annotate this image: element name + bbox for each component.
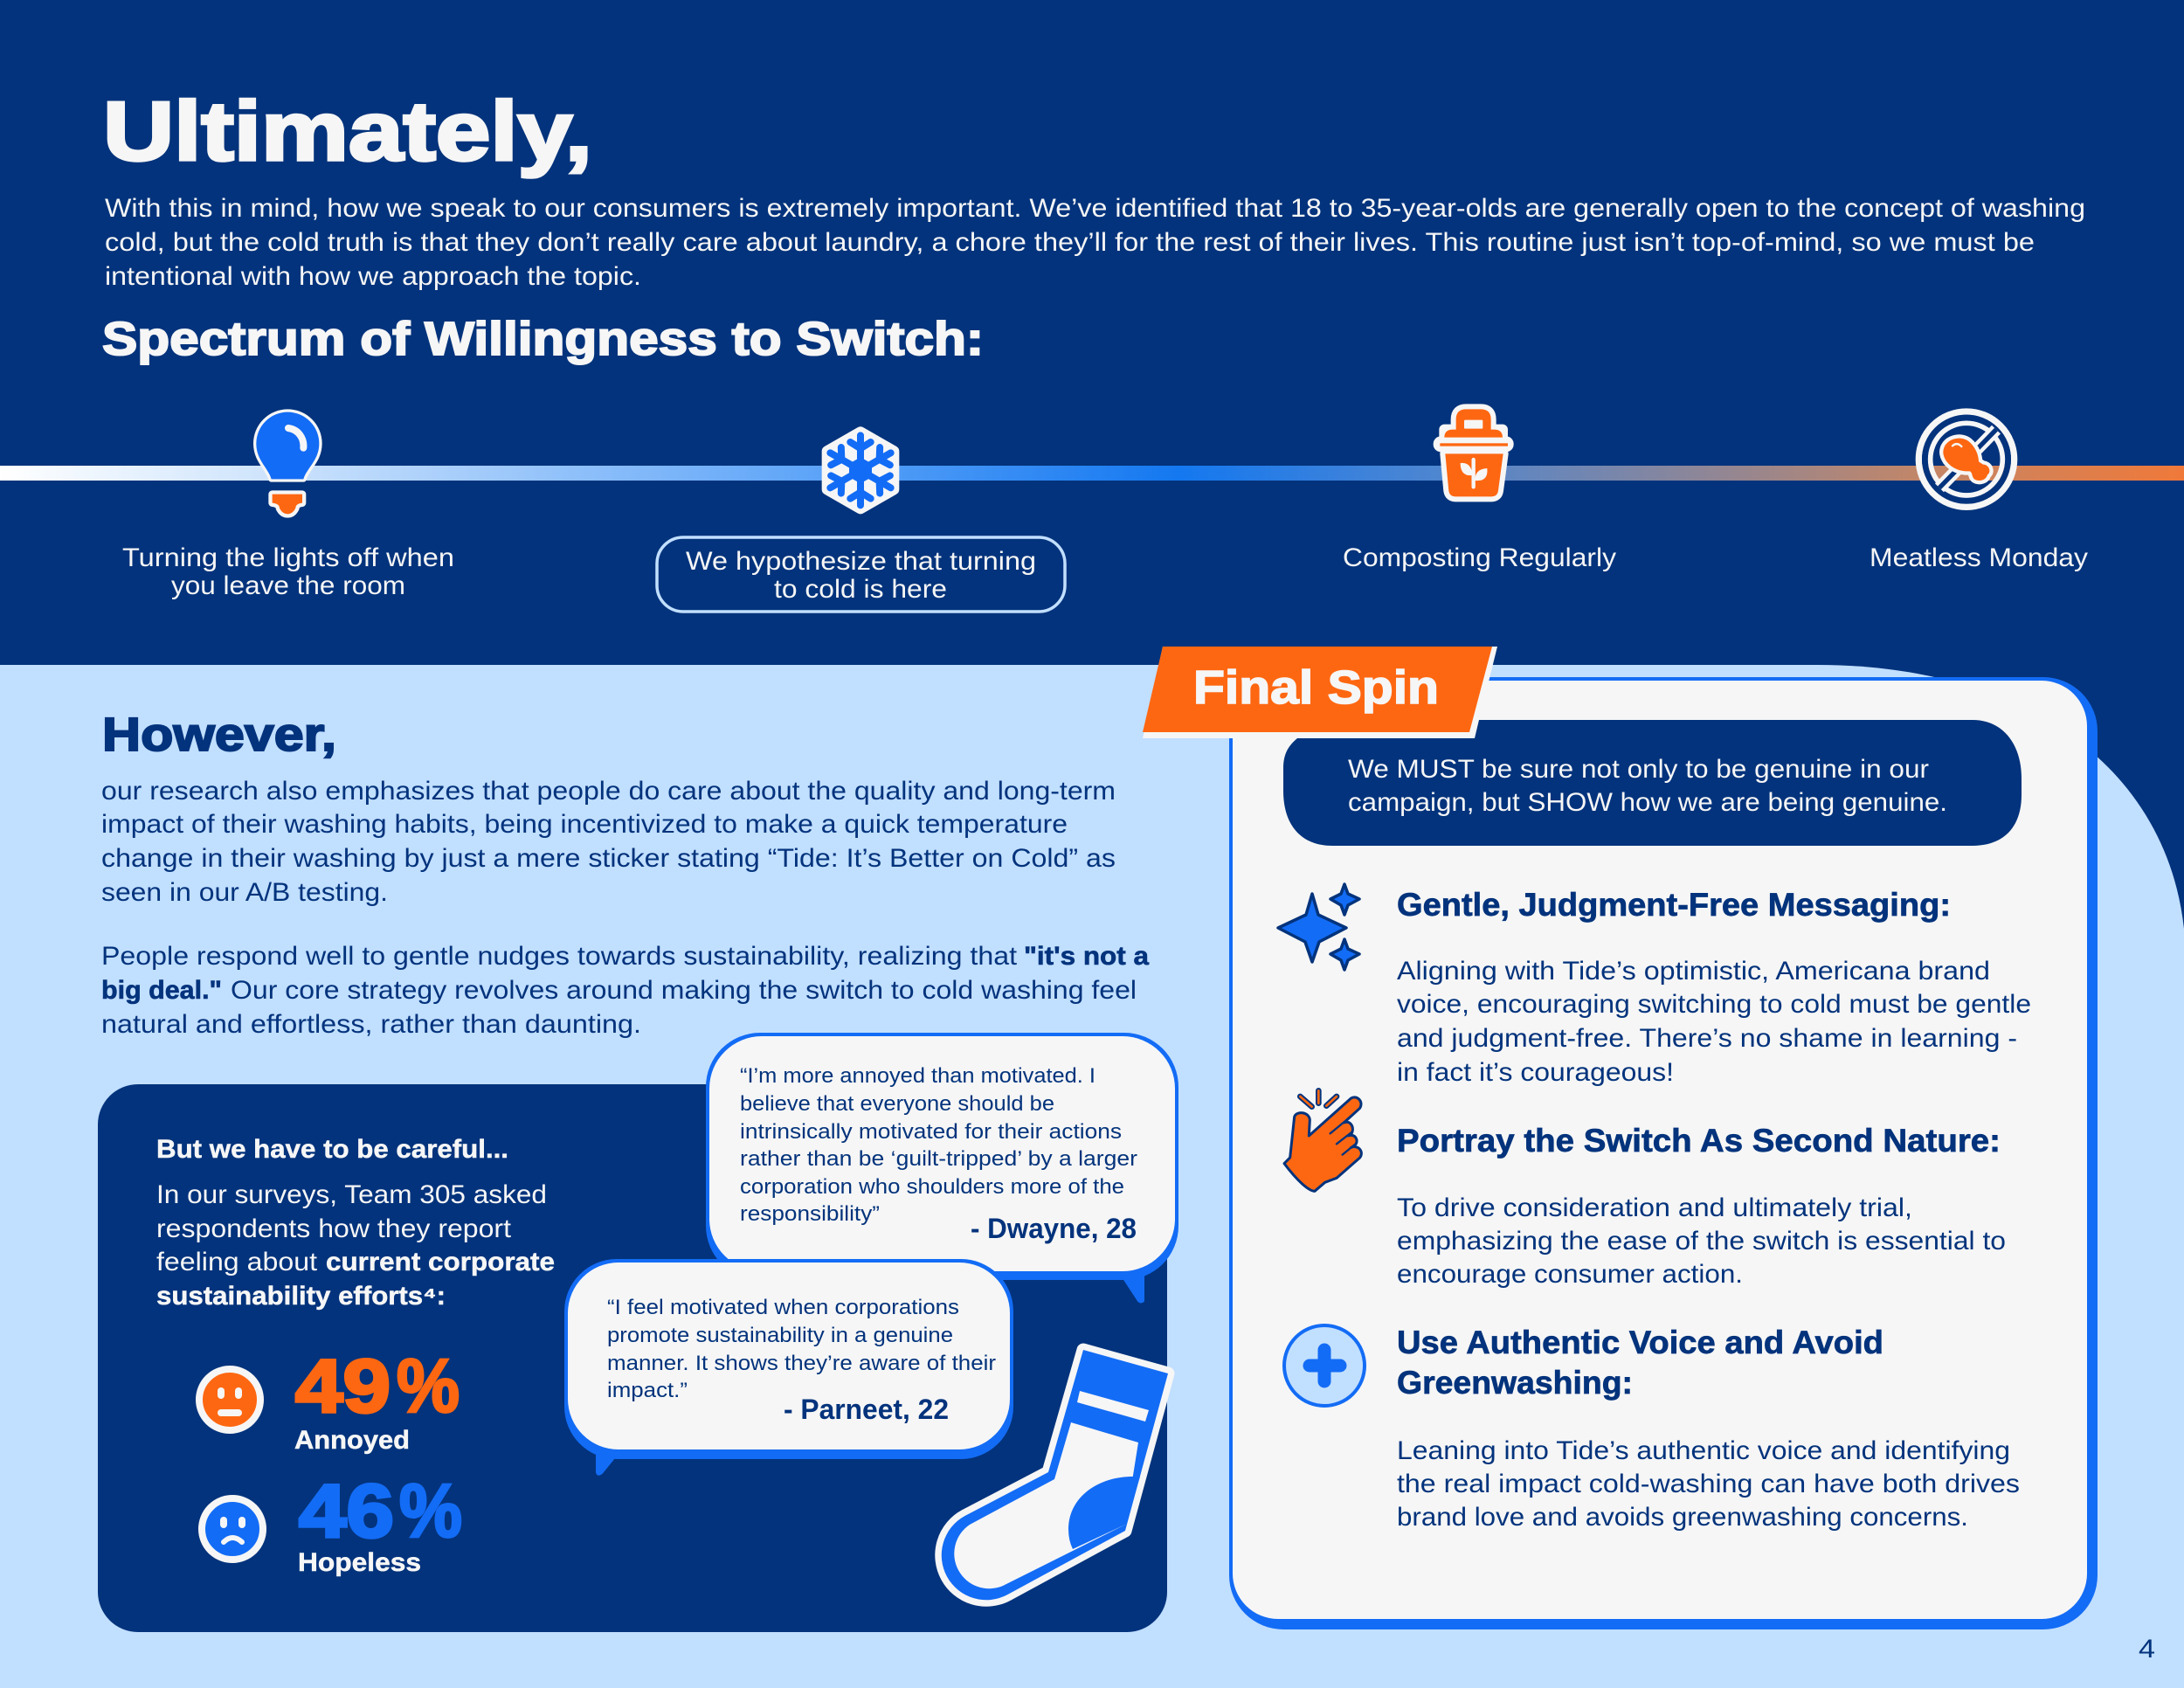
- stat: 49% annoyed: Annoyed: [294, 1426, 410, 1455]
- stat: 49% annoyed: 49: [295, 1345, 390, 1429]
- gentle nudges paragraph: big deal.": [101, 976, 222, 1005]
- lower light-blue background panel: [0, 665, 2184, 1688]
- speech bubble: Parneet: “I feel motivated when corporations: [607, 1296, 959, 1319]
- speech bubble: Dwayne: [706, 1033, 1178, 1302]
- gentle nudges paragraph: natural and effortless, rather than daunting.: [101, 1010, 641, 1039]
- label: hypothesis callout: [657, 537, 1065, 612]
- speech bubble: Parneet: promote sustainability in a genuine: [607, 1324, 953, 1347]
- gentle nudges paragraph: "it's not a: [1024, 942, 1149, 971]
- careful heading: But we have to be careful...: [156, 1135, 508, 1164]
- icon: no meat: [1918, 412, 2015, 507]
- spectrum gradient track: [0, 466, 2184, 481]
- icon: snowflake: [826, 432, 895, 508]
- intro paragraph: [105, 194, 2085, 291]
- label: hypothesis callout: We hypothesize that turning: [686, 547, 1036, 576]
- survey description: In our surveys, Team 305 asked: [156, 1180, 547, 1209]
- icon: light bulb: [256, 412, 319, 514]
- stat: 46% hopeless: Hopeless: [298, 1548, 421, 1577]
- survey description: respondents how they report: [156, 1214, 512, 1243]
- icon: sparkles: [1278, 884, 1359, 970]
- speech bubble: Parneet: manner. It shows they’re aware of their: [607, 1352, 996, 1375]
- label: composting: Composting Regularly: [1343, 543, 1616, 572]
- research paragraph: seen in our A/B testing.: [101, 878, 388, 907]
- section: portray the switch: Portray the Switch As Second Nature:: [1397, 1123, 2001, 1159]
- icon: plus circle: [1284, 1325, 1365, 1406]
- section: authentic voice: Leaning into Tide’s authentic voice and identifying: [1397, 1436, 2010, 1465]
- research paragraph: [101, 777, 1116, 907]
- speech bubble: Dwayne: believe that everyone should be: [740, 1092, 1054, 1116]
- gentle nudges paragraph: People respond well to gentle nudges towards sustainability, realizing that: [101, 942, 1018, 971]
- survey description: feeling about: [156, 1248, 318, 1276]
- speech bubble: Parneet: - Parneet, 22: [784, 1394, 949, 1425]
- research paragraph: change in their washing by just a mere sticker stating “Tide: It’s Better on Cold” as: [101, 844, 1116, 873]
- heading: however: However,: [102, 709, 336, 761]
- panel: final spin card: [1229, 677, 2098, 1629]
- section: portray the switch: To drive consideration and ultimately trial,: [1397, 1193, 1912, 1222]
- label: turning the lights off: [122, 543, 454, 600]
- section: gentle messaging: voice, encouraging switching to cold must be gentle: [1397, 990, 2031, 1019]
- section: authentic voice: [1397, 1325, 2020, 1532]
- icon: hopeless face: [202, 1498, 263, 1560]
- icon: compost bucket: [1434, 409, 1514, 496]
- stat: 46% hopeless: [298, 1470, 462, 1577]
- label: turning the lights off: you leave the room: [171, 571, 405, 600]
- section: gentle messaging: Aligning with Tide’s optimistic, Americana brand: [1397, 957, 1990, 986]
- speech bubble: Dwayne: rather than be ‘guilt-tripped’ by a larger: [740, 1147, 1137, 1171]
- section: gentle messaging: and judgment-free. There’s no shame in learning -: [1397, 1024, 2017, 1053]
- label: turning the lights off: Turning the lights off when: [122, 543, 454, 572]
- research paragraph: our research also emphasizes that people do care about the quality and long-term: [101, 777, 1116, 806]
- label: hypothesis callout: to cold is here: [774, 575, 947, 604]
- intro paragraph: With this in mind, how we speak to our consumers is extremely important. We’ve identified that 18 to 35-year-olds are generally open to the concept of washing: [105, 194, 2085, 223]
- final spin tag: [1143, 647, 1497, 738]
- callout pill: [1283, 720, 2022, 846]
- icon: snapping hand: [1284, 1090, 1361, 1191]
- speech bubble: Parneet: [564, 1259, 1013, 1475]
- gentle nudges paragraph: [101, 942, 1149, 1039]
- spectrum heading: Spectrum of Willingness to Switch:: [102, 313, 984, 365]
- icon: sock: [942, 1350, 1168, 1600]
- speech bubble: Dwayne: intrinsically motivated for their actions: [740, 1120, 1122, 1144]
- stat: 49% annoyed: [294, 1345, 460, 1455]
- intro paragraph: cold, but the cold truth is that they don’t really care about laundry, a chore they’ll for the rest of their lives. This routine just isn’t top-of-mind, so we must be: [105, 228, 2035, 257]
- final spin tag: Final Spin: [1193, 661, 1439, 714]
- section: authentic voice: the real impact cold-washing can have both drives: [1397, 1470, 2020, 1498]
- title: Ultimately,: [103, 85, 592, 178]
- icon: annoyed face: [199, 1369, 260, 1430]
- section: portray the switch: [1397, 1123, 2006, 1289]
- section: authentic voice: Greenwashing:: [1397, 1365, 1633, 1401]
- section: gentle messaging: Gentle, Judgment-Free Messaging:: [1397, 887, 1951, 923]
- section: portray the switch: encourage consumer action.: [1397, 1260, 1743, 1289]
- survey description: [156, 1180, 555, 1311]
- stat: 46% hopeless: %: [399, 1470, 462, 1553]
- speech bubble: Dwayne: - Dwayne, 28: [971, 1213, 1137, 1244]
- stat: 49% annoyed: %: [397, 1345, 460, 1429]
- speech bubble: Parneet: impact.”: [607, 1379, 688, 1402]
- gentle nudges paragraph: Our core strategy revolves around making the switch to cold washing feel: [231, 976, 1137, 1005]
- section: authentic voice: brand love and avoids greenwashing concerns.: [1397, 1503, 1968, 1532]
- survey description: current corporate: [326, 1248, 555, 1276]
- research paragraph: impact of their washing habits, being incentivized to make a quick temperature: [101, 810, 1068, 839]
- callout pill: We MUST be sure not only to be genuine in our: [1348, 755, 1929, 784]
- section: authentic voice: Use Authentic Voice and Avoid: [1397, 1325, 1883, 1360]
- page number: 4: [2139, 1635, 2155, 1664]
- callout pill: campaign, but SHOW how we are being genuine.: [1348, 788, 1947, 817]
- speech bubble: Dwayne: corporation who shoulders more of the: [740, 1175, 1124, 1199]
- stat: 46% hopeless: 46: [299, 1470, 394, 1553]
- section: gentle messaging: [1397, 887, 2031, 1087]
- intro paragraph: intentional with how we approach the topic.: [105, 262, 641, 291]
- section: gentle messaging: in fact it’s courageous!: [1397, 1058, 1674, 1087]
- section: portray the switch: emphasizing the ease of the switch is essential to: [1397, 1227, 2006, 1256]
- speech bubble: Dwayne: responsibility”: [740, 1202, 880, 1226]
- survey description: sustainability efforts⁴:: [156, 1282, 446, 1311]
- panel: but we have to be careful: [98, 1084, 1167, 1632]
- label: meatless monday: Meatless Monday: [1870, 543, 2088, 572]
- speech bubble: Dwayne: “I’m more annoyed than motivated. I: [740, 1064, 1095, 1088]
